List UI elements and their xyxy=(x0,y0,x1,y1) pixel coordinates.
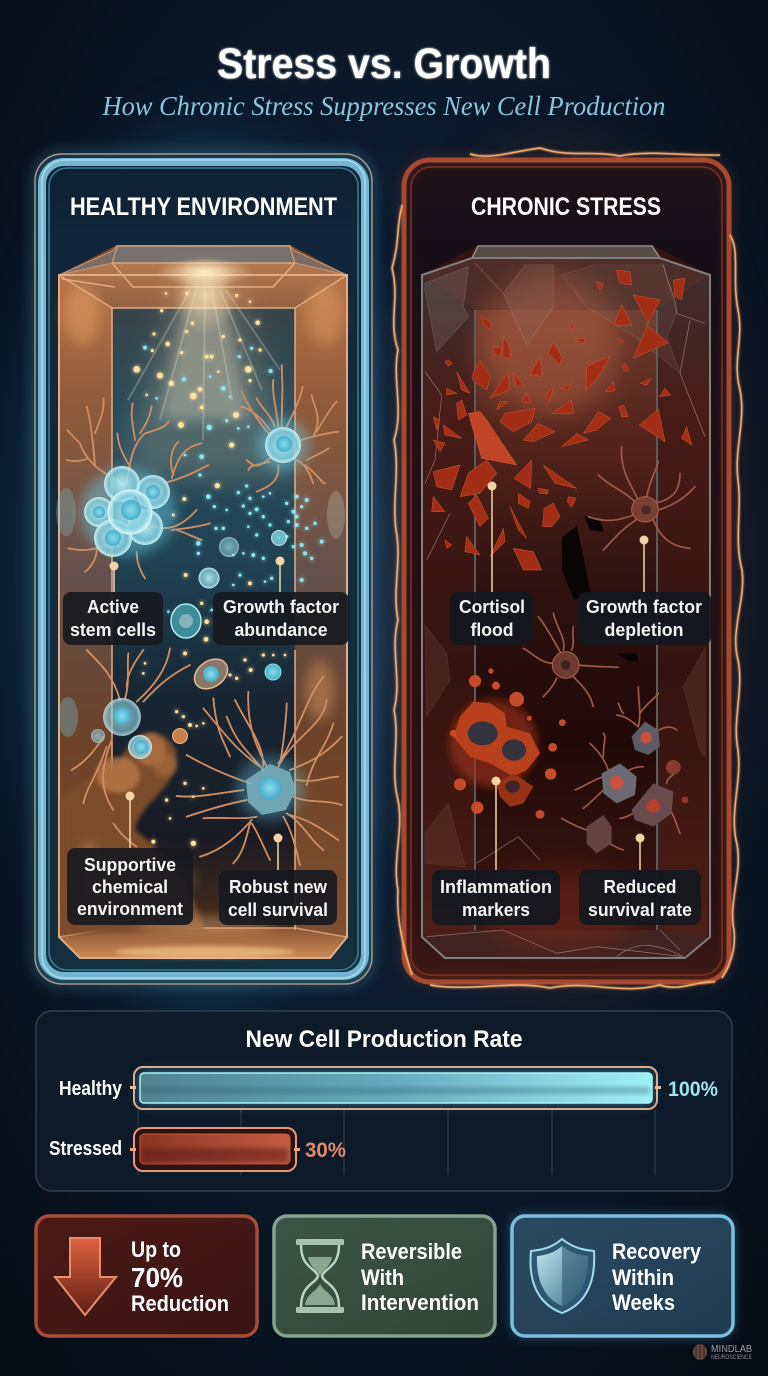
lightning cracks around frame xyxy=(392,148,743,989)
callout: supportive chemical environment: chemical xyxy=(92,876,168,897)
card text: reversible xyxy=(361,1239,479,1315)
surviving new cell xyxy=(236,756,304,820)
callout: reduced survival rate xyxy=(579,834,701,925)
dark holes in glass xyxy=(562,516,638,662)
bar chart: new cell production rate xyxy=(36,1011,732,1191)
logo: mindlab neuroscience xyxy=(693,1344,752,1361)
light rays xyxy=(120,255,300,480)
callout: inflammation markers xyxy=(432,776,560,925)
card text: reduction: Reduction xyxy=(131,1291,229,1316)
card text: reversible: With xyxy=(361,1265,404,1290)
callout: reduced survival rate: survival rate xyxy=(588,899,692,920)
panel: chronic stress xyxy=(392,148,743,989)
callout: cortisol flood: flood xyxy=(470,619,514,640)
callout: growth factor depletion xyxy=(578,536,711,645)
callout: growth factor abundance xyxy=(213,556,349,645)
heading: chronic stress: CHRONIC STRESS xyxy=(471,193,661,221)
panel: healthy environment xyxy=(35,154,372,984)
dendrites xyxy=(67,365,338,578)
callout: inflammation markers: Inflammation xyxy=(440,876,552,897)
icon: shield xyxy=(530,1239,594,1313)
depleted neurons xyxy=(523,447,695,707)
damaged cells xyxy=(562,687,688,853)
card text: reversible: Intervention xyxy=(361,1290,479,1315)
bar: stressed: 30% xyxy=(305,1139,346,1162)
title: Stress vs. Growth xyxy=(217,40,551,88)
heading: healthy: HEALTHY ENVIRONMENT xyxy=(70,193,337,221)
card: recovery within weeks xyxy=(512,1216,733,1336)
logo: mindlab neuroscience: MINDLAB xyxy=(711,1344,752,1355)
card text: recovery: Weeks xyxy=(612,1290,675,1315)
callout: growth factor abundance: abundance xyxy=(234,619,328,640)
callout: supportive chemical environment xyxy=(67,792,193,925)
callout: robust new cell survival xyxy=(219,834,337,925)
callout: cortisol flood: Cortisol xyxy=(459,596,525,617)
card: reversible with intervention xyxy=(274,1216,495,1336)
callout: reduced survival rate: Reduced xyxy=(604,876,676,897)
chemical environment blob xyxy=(62,660,334,934)
cortisol shards xyxy=(432,270,692,570)
card text: reversible: Reversible xyxy=(361,1239,462,1264)
bar: stressed: Stressed xyxy=(49,1138,122,1160)
callout: growth factor depletion: depletion xyxy=(604,619,684,640)
bar: healthy: 100% xyxy=(668,1078,718,1101)
panel frame: red xyxy=(404,160,729,982)
card text: reduction: 70% xyxy=(131,1262,183,1293)
callout: growth factor abundance: Growth factor xyxy=(223,596,339,617)
bar: healthy: Healthy xyxy=(59,1078,123,1100)
callout: active stem cells xyxy=(63,562,163,645)
glass chamber: healthy xyxy=(59,245,347,958)
card text: recovery: Recovery xyxy=(612,1239,702,1264)
card text: recovery xyxy=(612,1239,702,1315)
inflammation clusters xyxy=(450,668,566,819)
glass chamber: cracked xyxy=(422,245,710,958)
callout: supportive chemical environment: Supportive xyxy=(84,854,176,875)
card text: reduction xyxy=(131,1237,229,1316)
subtitle: How Chronic Stress Suppresses New Cell Production xyxy=(102,91,665,121)
bar: stressed xyxy=(49,1128,346,1171)
logo: mindlab neuroscience: NEUROSCIENCE xyxy=(711,1355,752,1361)
callout: active stem cells: stem cells xyxy=(70,619,156,640)
icon: hourglass xyxy=(296,1239,344,1313)
callout: active stem cells: Active xyxy=(87,596,139,617)
active stem cell cluster xyxy=(80,466,176,557)
card text: reduction: Up to xyxy=(131,1237,181,1262)
panel frame: blue xyxy=(35,154,372,984)
particles: growth factors xyxy=(133,292,324,846)
callout: growth factor depletion: Growth factor xyxy=(586,596,702,617)
card text: recovery: Within xyxy=(612,1265,674,1290)
broken glass panes xyxy=(425,263,705,560)
neural stem cells xyxy=(56,419,345,759)
callout: supportive chemical environment: environment xyxy=(77,898,183,919)
callout: robust new cell survival: cell survival xyxy=(228,899,328,920)
callout: cortisol flood xyxy=(450,482,533,645)
card: up to 70% reduction xyxy=(36,1216,257,1336)
callout: inflammation markers: markers xyxy=(462,899,530,920)
icon: down arrow xyxy=(55,1238,116,1315)
chart title: New Cell Production Rate xyxy=(246,1026,522,1053)
bar: healthy xyxy=(59,1067,718,1109)
callout: robust new cell survival: Robust new xyxy=(229,876,328,897)
